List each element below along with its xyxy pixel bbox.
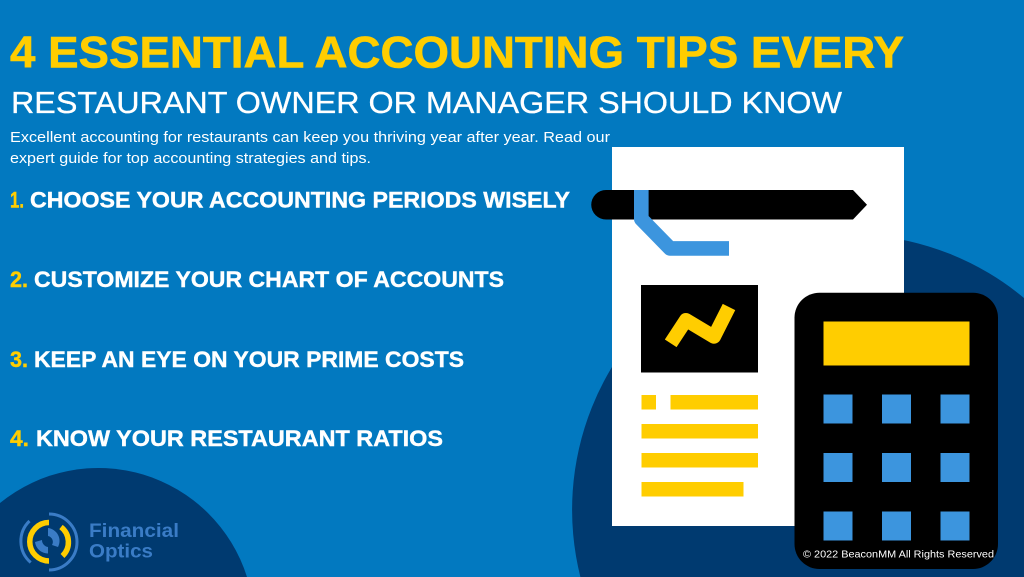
calculator keys xyxy=(824,394,970,540)
calculator display xyxy=(824,322,970,366)
tip 4: KNOW YOUR RESTAURANT RATIOS xyxy=(36,426,443,451)
bottom-left navy circle xyxy=(0,468,247,577)
tip 1: 1. xyxy=(10,188,24,212)
tip 4: 4. xyxy=(10,426,29,451)
icon: document with pen and chart xyxy=(591,147,904,526)
chart thumbnail xyxy=(641,285,758,372)
subtitle: RESTAURANT OWNER OR MANAGER SHOULD KNOW xyxy=(11,85,843,120)
tip 2: CUSTOMIZE YOUR CHART OF ACCOUNTS xyxy=(34,267,504,292)
intro paragraph: Excellent accounting for restaurants can keep you thriving year after year. Read our xyxy=(10,129,610,146)
tip 2: 2. xyxy=(10,267,28,292)
document page xyxy=(612,147,904,526)
icon: pen xyxy=(591,190,867,248)
copyright notice: © 2022 BeaconMM All Rights Reserved xyxy=(803,548,994,560)
tip 1: CHOOSE YOUR ACCOUNTING PERIODS WISELY xyxy=(30,188,570,212)
intro paragraph: expert guide for top accounting strategies and tips. xyxy=(10,150,371,167)
document text lines xyxy=(642,395,758,496)
large navy background circle xyxy=(572,234,1024,577)
title: 4 ESSENTIAL ACCOUNTING TIPS EVERY xyxy=(10,28,904,78)
logo wordmark xyxy=(89,520,179,562)
icon: calculator xyxy=(794,293,998,569)
intro paragraph xyxy=(10,129,610,167)
logo wordmark: Financial xyxy=(89,520,179,542)
tip 3: 3. xyxy=(10,347,28,372)
icon: Financial Optics logo mark xyxy=(21,514,77,570)
tip 3: KEEP AN EYE ON YOUR PRIME COSTS xyxy=(34,347,464,372)
logo wordmark: Optics xyxy=(89,540,153,562)
